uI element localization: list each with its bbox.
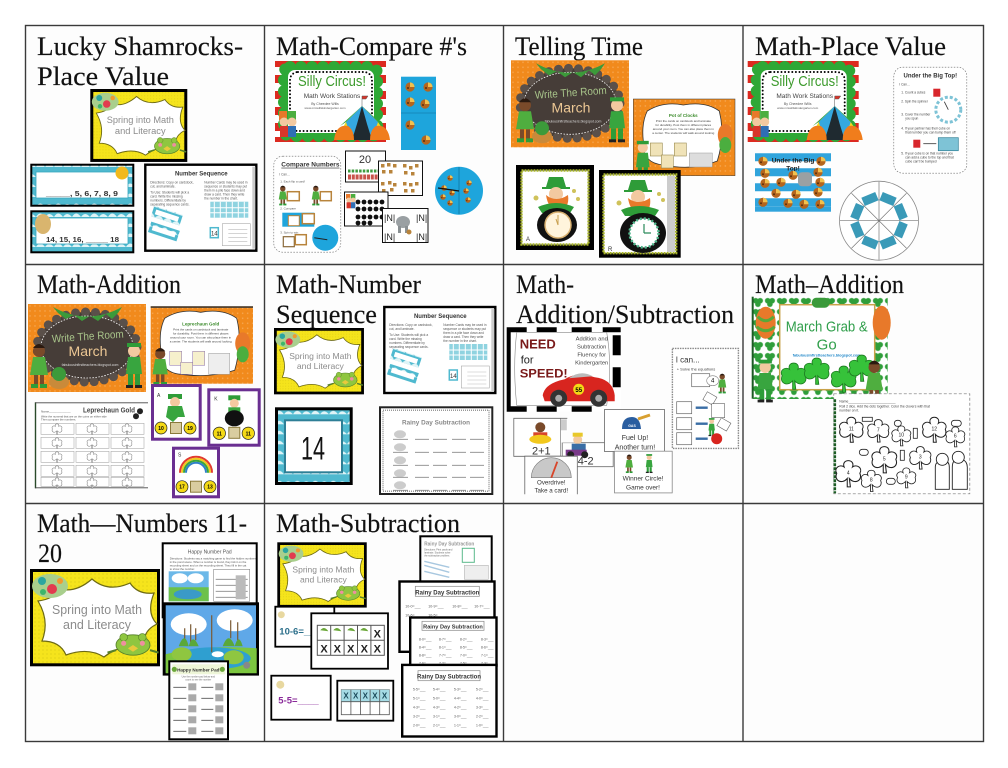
worksheet: Rainy Day Subtraction front: 5-0=___ <box>433 697 446 701</box>
game card: Overdrive: Take a card! <box>534 488 568 495</box>
cover: Silly Circus <box>748 61 863 142</box>
clock card R: R <box>608 247 613 253</box>
cover: Spring into Math and Literacy <box>279 544 366 606</box>
cover: Spring into Math and Literacy <box>92 91 186 160</box>
spinner <box>435 167 483 215</box>
ten frame card: X <box>320 643 328 655</box>
ten frame card: X <box>374 643 382 655</box>
game card: Winner Circle: Game over! <box>626 485 660 492</box>
worksheet: clover addition game: 7 <box>877 427 880 433</box>
heading: Math-Addition: Math-Addition <box>37 270 181 299</box>
worksheet: Rainy Day Subtraction front: 3-0=___ <box>454 715 467 719</box>
game card: 2+1 <box>514 418 568 457</box>
card: twenty black dots <box>344 192 388 226</box>
compare card K: 11 <box>246 431 251 437</box>
cover: Silly Circus: By Cheedee Wills <box>784 102 812 106</box>
worksheet: Number Sequence: draw a card. Then they write <box>443 335 484 339</box>
worksheet: Rainy Day Subtraction front: 4-4=___ <box>454 697 467 701</box>
worksheet: Rainy Day Subtraction front: 5-2=___ <box>476 688 489 692</box>
cover: Need for Speed: Kindergarten <box>575 360 608 366</box>
number card: 14 <box>276 409 351 484</box>
sheet: Under the Big Top directions: that number you can bump them off <box>905 131 956 135</box>
worksheet: Rainy Day Subtraction front: 4-3=___ <box>433 706 446 710</box>
number card: 20 <box>346 151 386 182</box>
panel: Math-Addition March Grab and Go <box>752 270 970 494</box>
cover: Write the Room March: Write The Room <box>534 85 607 102</box>
compare card K: 11 <box>217 431 222 437</box>
equation card: 10-6 <box>275 607 334 647</box>
sheet: Pot of Clocks: Pot of Clocks <box>669 113 698 118</box>
worksheet: clover addition game: 9 <box>905 474 908 480</box>
panel: Lucky Shamrocks place value <box>31 32 256 252</box>
sheet: Happy Number Pad recording page: Use the number pad below and <box>182 675 216 678</box>
card: ten frame of coins <box>378 161 422 196</box>
sheet: Leprechaun Gold instructions: for durability. Post them in different places <box>173 331 229 335</box>
game board: Under the Big Top <box>755 153 831 212</box>
game card: 4-2: 4-2 <box>578 456 594 468</box>
worksheet: Rainy Day Subtraction middle: 7-7=___ <box>439 653 452 657</box>
worksheet: Rainy Day Subtraction middle: 7-1=___ <box>481 653 494 657</box>
worksheet: Rainy Day Subtraction back: Rainy Day Subtraction <box>415 590 480 596</box>
heading: Lucky Shamrocks: Lucky Shamrocks- <box>37 32 243 61</box>
sheet: Under the Big Top directions: can add a cube to the top and that <box>905 156 954 160</box>
worksheet: Leprechaun Gold <box>35 402 148 488</box>
worksheet: Number Sequence: cut, and laminate. <box>150 185 176 189</box>
worksheet: Number Sequence: sequence or students may put <box>204 185 247 189</box>
sheet: Happy Number Pad: to show the number. <box>170 567 195 571</box>
worksheet: Rainy Day Subtraction middle: 8-6=___ <box>481 645 494 649</box>
worksheet: Rainy Day Subtraction middle: 7-6=___ <box>419 661 432 665</box>
sheet: Under the Big Top directions <box>894 67 967 173</box>
worksheet: Rainy Day Subtraction front: Rainy Day Subtraction <box>417 675 481 681</box>
number card: 20: 20 <box>359 154 371 166</box>
worksheet: Number Sequence: them in a pile face down and <box>443 331 484 335</box>
clock card A: A <box>526 237 530 243</box>
cover: March Grab and Go: fabulousinfirstteachers.blogspot.com <box>793 354 861 358</box>
sheet: Rainy Day directions: the subtraction problem. <box>424 554 450 557</box>
sheet: Pot of Clocks: for durability. Post them in different places <box>656 123 712 127</box>
worksheet: Rainy Day Subtraction back: 10-6=___ <box>405 613 422 617</box>
domino card with cookies <box>401 77 436 150</box>
sheet: Happy Number Pad recording page <box>169 661 228 739</box>
ten frame card: X <box>361 643 369 655</box>
worksheet: Rainy Day Subtraction front: 2-0=___ <box>413 724 426 728</box>
sheet: Leprechaun Gold instructions <box>151 306 253 385</box>
cover: Need for Speed <box>507 327 621 412</box>
game card: Winner Circle: Winner Circle! <box>623 476 664 483</box>
worksheet: Rainy Day Subtraction back: 10-9=___ <box>428 604 445 608</box>
sheet: Under the Big Top directions: 1. Count a cubes <box>901 91 926 95</box>
game card: Winner Circle <box>614 451 672 493</box>
worksheet: Rainy Day Subtraction middle: 7-0=___ <box>460 653 473 657</box>
worksheet: Rainy Day Subtraction middle: 7-5=___ <box>460 661 473 665</box>
worksheet: Number Sequence: cut, and laminate. <box>389 327 415 331</box>
ten frame card: all crossed: X <box>363 692 369 701</box>
worksheet: Rainy Day Subtraction middle: Rainy Day Subtraction <box>423 624 483 630</box>
worksheet: Rainy Day Subtraction front: 2-2=___ <box>476 715 489 719</box>
sheet: Rainy Day directions: laminate. Students solve <box>424 551 451 554</box>
worksheet: Rainy Day Subtraction: Rainy Day Subtraction <box>402 419 470 426</box>
panel: Math-Compare numbers <box>274 32 483 252</box>
worksheet: Rainy Day Subtraction middle: 8-1=___ <box>439 645 452 649</box>
card: elephant with tally marks: |N| <box>384 232 395 242</box>
worksheet: Number Sequence: To Use: Students will pick a <box>389 333 428 337</box>
worksheet: Rainy Day Subtraction middle: 8-8=___ <box>419 653 432 657</box>
worksheet: Rainy Day Subtraction middle: 8-3=___ <box>481 637 494 641</box>
ten frame card <box>311 613 388 669</box>
worksheet: Rainy Day Subtraction front: 5-4=___ <box>433 688 446 692</box>
game card: Fuel Up <box>604 410 664 452</box>
cover: Need for Speed: for <box>521 354 534 366</box>
worksheet: Rainy Day Subtraction front: 5-5=___ <box>413 688 426 692</box>
cover: Spring into Math and Literacy: and Literacy <box>297 361 345 371</box>
heading: Math-Number Sequence: Sequence <box>276 300 377 329</box>
cover: Spring into Math and Literacy: Spring into Math <box>289 351 352 361</box>
worksheet: Number Sequence: separating sequence cards. <box>150 203 190 207</box>
sheet: Happy Number Pad <box>163 543 257 617</box>
cover: Silly Circus: Math Work Stations <box>304 93 361 100</box>
worksheet: Number Sequence: Number Cards may be used in <box>204 181 248 185</box>
cover: Need for Speed: Addition and <box>576 336 608 342</box>
equation card: 10-6: 10-6=__ <box>279 627 315 638</box>
cover: Spring into Math and Literacy: Spring into Math <box>292 565 355 575</box>
game card: Overdrive <box>525 456 577 495</box>
game card: Overdrive: Overdrive! <box>537 480 566 487</box>
heading: Lucky Shamrocks: Place Value <box>37 62 169 91</box>
heading: Math Numbers 11-20: 20 <box>38 539 62 568</box>
worksheet: clover addition game: 11 <box>849 426 854 432</box>
clock card A <box>516 165 594 250</box>
ten frame card: all crossed: X <box>382 692 388 701</box>
cover: Write the Room March <box>511 60 629 147</box>
sheet: Leprechaun Gold instructions: around your room. You can also place them in <box>170 335 232 339</box>
heading: Math Numbers 11-20: Math—Numbers 11- <box>37 509 247 538</box>
cover: Silly Circus <box>275 61 390 142</box>
worksheet: clover addition game <box>834 394 970 494</box>
sheet: I can solve the equations: I can... <box>676 356 700 365</box>
worksheet: Number Sequence: them in a pile face down and <box>204 189 245 193</box>
worksheet: Number Sequence: Directions: Copy on cardstock, <box>150 181 194 185</box>
sheet: Pot of Clocks: around your room. You can also place them in <box>653 127 714 131</box>
number card: blank, 5, 6, 7, 8, 9: _____, 5, 6, 7, 8, 9 <box>45 189 118 198</box>
heading: Math-Addition: Math–Addition <box>755 270 904 299</box>
worksheet: Rainy Day Subtraction middle: 8-4=___ <box>419 645 432 649</box>
worksheet: Number Sequence: 14 <box>450 374 457 380</box>
worksheet: clover addition game: 4 <box>847 470 850 476</box>
game card: Fuel Up: Another turn! <box>615 444 655 452</box>
sheet: I can solve the equations: + Solve the equations <box>677 367 715 372</box>
sheet: I can solve the equations: 4 <box>711 379 715 385</box>
sheet: Rainy Day directions: Directions: Print cards and <box>424 548 453 551</box>
worksheet: Rainy Day Subtraction back <box>400 582 494 652</box>
sheet: Rainy Day directions: Rainy Day Subtraction <box>424 541 474 547</box>
panel: Math-Subtraction <box>271 509 496 736</box>
compare card A: 10 <box>158 426 164 432</box>
cover: Spring into Math and Literacy: Spring into Math <box>52 603 142 617</box>
worksheet: Rainy Day Subtraction middle <box>410 618 496 666</box>
worksheet: Leprechaun Gold: Then compare the numbers. <box>41 417 76 421</box>
worksheet: clover addition game: 12 <box>932 426 937 432</box>
spinner wheel <box>840 181 918 260</box>
heading: Math-Compare #'s: Math-Compare #'s <box>276 32 467 61</box>
card: elephant with tally marks: |N| <box>416 232 427 242</box>
sheet: Under the Big Top directions: you spun <box>905 117 918 121</box>
worksheet: Leprechaun Gold: Name_____________ <box>41 409 71 413</box>
cover: Spring into Math and Literacy: and Literacy <box>300 575 348 585</box>
ten frame card: X <box>334 643 342 655</box>
worksheet: Number Sequence: numbers. Differentiate by <box>389 341 425 345</box>
cover: Silly Circus: Silly Circus! <box>771 73 839 90</box>
ten frame card: all crossed: X <box>372 692 378 701</box>
cover: Write the Room March <box>28 304 146 392</box>
worksheet: Rainy Day Subtraction front: 1-1=___ <box>454 724 467 728</box>
game board: Under the Big Top: Top! <box>786 165 800 172</box>
worksheet: Rainy Day Subtraction middle: 7-2=___ <box>439 661 452 665</box>
worksheet: Number Sequence: the number in the chart. <box>204 197 238 201</box>
cover: Silly Circus: www.mrswillskindergarten.com <box>777 106 819 110</box>
cover: March Grab and Go <box>752 297 891 402</box>
worksheet: clover addition game: 3 <box>919 454 922 460</box>
game card: Fuel Up: Fuel Up! <box>622 435 648 442</box>
panel: Math-Addition/Subtraction <box>507 270 738 495</box>
worksheet: Rainy Day Subtraction front: 5-1=___ <box>413 697 426 701</box>
worksheet: Rainy Day Subtraction middle: 8-7=___ <box>439 637 452 641</box>
cover: Need for Speed: Fluency for <box>577 352 606 358</box>
number card: 14, 15, 16, blank, 18 <box>31 211 133 252</box>
cover: Spring into Math and Literacy: and Literacy <box>115 126 166 136</box>
game card: 2+1: 2+1 <box>532 445 551 457</box>
sheet: Under the Big Top directions: 4. If your partner has their cube on <box>901 127 950 131</box>
worksheet: Rainy Day Subtraction front: 3-2=___ <box>413 715 426 719</box>
cover: Spring into Math and Literacy: and Literacy <box>63 618 132 632</box>
compare card S: S <box>178 453 182 459</box>
compare card K: K <box>214 396 218 402</box>
clock card R <box>599 170 681 258</box>
ten frame card: all crossed: X <box>343 692 349 701</box>
worksheet: Number Sequence: Directions: Copy on cardstock, <box>389 323 433 327</box>
panel: Math-Addition leprechaun gold <box>28 270 259 497</box>
worksheet: Number Sequence <box>384 307 495 393</box>
sheet: Leprechaun Gold instructions: Print the cards on cardstock and laminate <box>173 327 229 331</box>
worksheet: Rainy Day Subtraction middle: 8-2=___ <box>460 637 473 641</box>
sheet: Under the Big Top directions: 5. If your cube is on that number you <box>901 152 953 156</box>
cover: Write the Room March: March <box>552 99 590 115</box>
cover: Silly Circus: By Cheedee Wills <box>311 102 339 106</box>
sheet: Under the Big Top directions: I Can... <box>899 83 910 87</box>
sheet: Compare Numbers: 3. Spin to win <box>280 231 299 235</box>
sheet: Happy Number Pad: recording sheet and on the recording sheet. They fill in the cat <box>170 563 247 567</box>
compare card A: 19 <box>187 426 193 432</box>
worksheet: Rainy Day Subtraction back: 10-7=___ <box>474 604 491 608</box>
worksheet: Rainy Day Subtraction front <box>402 665 496 736</box>
worksheet: Number Sequence: card. Write the missing <box>150 195 183 199</box>
game card: 4-2 <box>562 432 613 468</box>
cover: Spring into Math and Literacy: Spring into Math <box>107 115 174 125</box>
cover: March Grab and Go: Go <box>817 337 837 354</box>
heading: Math-Number Sequence: Math-Number <box>276 270 421 299</box>
number card: 14, 15, 16, blank, 18: 14, 15, 16, _____ 18 <box>46 235 119 244</box>
cover: Write the Room March: Write The Room <box>51 329 124 346</box>
sheet: Happy Number Pad recording page: count to see the number <box>185 678 211 681</box>
compare card S: 17 <box>179 485 185 491</box>
worksheet: Number Sequence: Number Sequence <box>414 314 467 320</box>
cover: Write the Room March: March <box>69 343 107 359</box>
number card: 14: 14 <box>301 430 325 466</box>
heading: Math-Addition/Subtraction: Math- <box>516 270 574 299</box>
sheet: Happy Number Pad: Happy Number Pad <box>188 549 232 555</box>
worksheet: Number Sequence: draw a card. Then they write <box>204 193 245 197</box>
sheet: Leprechaun Gold instructions: a center. The students will walk around looking <box>170 339 232 343</box>
heading: Math Numbers 11-20 <box>37 509 247 568</box>
cover: Silly Circus: www.mrswillskindergarten.com <box>304 106 346 110</box>
worksheet: clover addition game: 8 <box>870 477 873 483</box>
worksheet: Leprechaun Gold: Write the numeral that are on the coins on either side <box>41 414 107 418</box>
worksheet: clover addition game: Name_________________________ <box>839 399 896 403</box>
sheet: Happy Number Pad: Directions: Students say a matching game to find the hidden numbers <box>170 556 257 560</box>
worksheet: Rainy Day Subtraction middle: 8-0=___ <box>419 637 432 641</box>
worksheet: Number Sequence: To Use: Students will pick a <box>150 191 189 195</box>
worksheet: Number Sequence: separating sequence cards. <box>389 345 429 349</box>
heading: Math-Number Sequence <box>276 270 421 329</box>
cover: Write the Room March: fabulousinfirstteachers.blogspot.com <box>545 119 601 123</box>
sheet: Rainy Day directions <box>420 536 492 582</box>
worksheet: Rainy Day Subtraction back: 10-5=___ <box>428 613 445 617</box>
sheet: Under the Big Top directions: Under the Big Top! <box>904 74 957 80</box>
sheet: Happy Number Pad: in the pond scene. When a number is found, they tick it on the <box>170 560 247 564</box>
compare card S <box>174 448 218 497</box>
sheet: Happy Number Pad recording page: Happy Number Pad <box>177 667 220 672</box>
worksheet: Number Sequence: card. Write the missing <box>389 337 422 341</box>
compare card K <box>209 390 259 445</box>
worksheet: Rainy Day Subtraction middle: 8-5=___ <box>460 645 473 649</box>
cover: March Grab and Go: March Grab & <box>786 319 868 336</box>
sheet: Compare Numbers: 2. Compare <box>280 207 296 211</box>
worksheet: Number Sequence: Number Sequence <box>175 172 228 178</box>
cover: Need for Speed: Subtraction <box>577 344 606 350</box>
heading: Telling Time: Telling Time <box>515 32 643 61</box>
sheet: I can solve the equations <box>672 348 738 448</box>
worksheet: clover addition game: number on it. <box>839 408 859 412</box>
cover: Silly Circus: Math Work Stations <box>776 93 834 100</box>
worksheet: clover addition game: 10 <box>899 432 904 438</box>
worksheet: Number Sequence: sequence or students may put <box>443 327 486 331</box>
compare card A: A <box>157 393 161 399</box>
sheet: Compare Numbers <box>274 156 341 252</box>
worksheet: clover addition game: 5 <box>883 456 886 462</box>
heading: Math-Subtraction: Math-Subtraction <box>276 509 460 538</box>
sheet: Compare Numbers: I Can... <box>279 173 290 177</box>
worksheet: Rainy Day Subtraction front: 4-0=___ <box>476 697 489 701</box>
panel: Math-Number Sequence <box>275 270 495 494</box>
cover: Need for Speed: NEED <box>520 336 556 351</box>
heading: Math-Addition/Subtraction: Addition/Subtraction <box>516 300 734 329</box>
sheet: Pot of Clocks <box>633 99 735 179</box>
compare card S: 13 <box>207 485 213 491</box>
ten frame card: all crossed: X <box>353 692 359 701</box>
pond scene card <box>164 604 258 674</box>
sheet: Under the Big Top directions: 2. Spin the spinner <box>901 100 929 104</box>
panel: Math numbers 11-20 <box>32 509 258 739</box>
heading: Math-Place Value: Math-Place Value <box>755 32 946 61</box>
worksheet: Rainy Day Subtraction front: 2-1=___ <box>433 724 446 728</box>
worksheet: Rainy Day Subtraction front: 3-3=___ <box>476 706 489 710</box>
worksheet: Rainy Day Subtraction front: 5-3=___ <box>454 688 467 692</box>
worksheet: Rainy Day Subtraction front: 3-1=___ <box>433 715 446 719</box>
cover: Spring into Math and Literacy <box>32 570 158 665</box>
number card: blank, 5, 6, 7, 8, 9 <box>31 165 133 206</box>
worksheet: Leprechaun Gold: Leprechaun Gold <box>83 405 135 414</box>
worksheet: Rainy Day Subtraction <box>380 407 492 494</box>
worksheet: Rainy Day Subtraction back: 10-8=___ <box>452 604 469 608</box>
card: elephant with tally marks: |N| <box>384 213 395 223</box>
compare card A <box>152 386 200 439</box>
cover: Write the Room March: fabulousinfirstteachers.blogspot.com <box>62 363 118 367</box>
ten frame card: all crossed <box>337 681 393 721</box>
worksheet: Number Sequence <box>145 165 256 251</box>
sheet: Under the Big Top directions: 3. Cover the number <box>901 113 931 117</box>
cover: Silly Circus: Silly Circus! <box>298 73 366 90</box>
card: elephant with tally marks <box>382 208 428 242</box>
cover: Need for Speed: SPEED! <box>520 366 568 380</box>
worksheet: clover addition game: Roll 2 dice. Add the dots together. Color the clovers with that <box>839 404 930 408</box>
sheet: Compare Numbers: Compare Numbers <box>281 162 340 169</box>
worksheet: Number Sequence: 14 <box>211 232 218 238</box>
worksheet: Rainy Day Subtraction middle: 7-3=___ <box>481 661 494 665</box>
equation card: 5-5: 5-5=____ <box>278 696 319 707</box>
worksheet: Rainy Day Subtraction back: 10-0=___ <box>405 604 422 608</box>
sheet: Pot of Clocks: a center. The students will walk around looking <box>652 131 715 135</box>
cover: Spring into Math and Literacy <box>275 329 363 393</box>
worksheet: Number Sequence: the number in the chart. <box>443 339 477 343</box>
worksheet: Rainy Day Subtraction front: 1-0=___ <box>476 724 489 728</box>
panel: Telling Time <box>511 32 735 258</box>
panel: Math-Place Value <box>748 32 967 260</box>
worksheet: Rainy Day Subtraction front: 4-2=___ <box>454 706 467 710</box>
card: elephant with tally marks: |N| <box>416 213 427 223</box>
heading: Lucky Shamrocks <box>37 32 243 91</box>
worksheet: Number Sequence: Number Cards may be used in <box>443 323 487 327</box>
sheet: Leprechaun Gold instructions: Leprechaun Gold <box>182 321 219 326</box>
equation card: 5-5 <box>271 676 331 720</box>
sheet: Under the Big Top directions: cube can't be bumped <box>905 160 937 164</box>
game card: Fuel Up: GAS <box>628 424 636 428</box>
sheet: Compare Numbers: 1. Each flip a card! <box>280 180 305 184</box>
cover: Need for Speed: 55 <box>575 388 583 394</box>
game board: Under the Big Top: Under the Big <box>772 157 814 164</box>
worksheet: clover addition game: 6 <box>954 433 957 439</box>
ten frame card: X <box>374 628 382 640</box>
worksheet: Number Sequence: numbers. Differentiate by <box>150 199 186 203</box>
ten frame card: X <box>347 643 355 655</box>
heading: Math-Addition/Subtraction <box>516 270 734 329</box>
sheet: Pot of Clocks: Print the cards on cardstock and laminate <box>656 119 711 123</box>
worksheet: Rainy Day Subtraction front: 4-3=___ <box>413 706 426 710</box>
